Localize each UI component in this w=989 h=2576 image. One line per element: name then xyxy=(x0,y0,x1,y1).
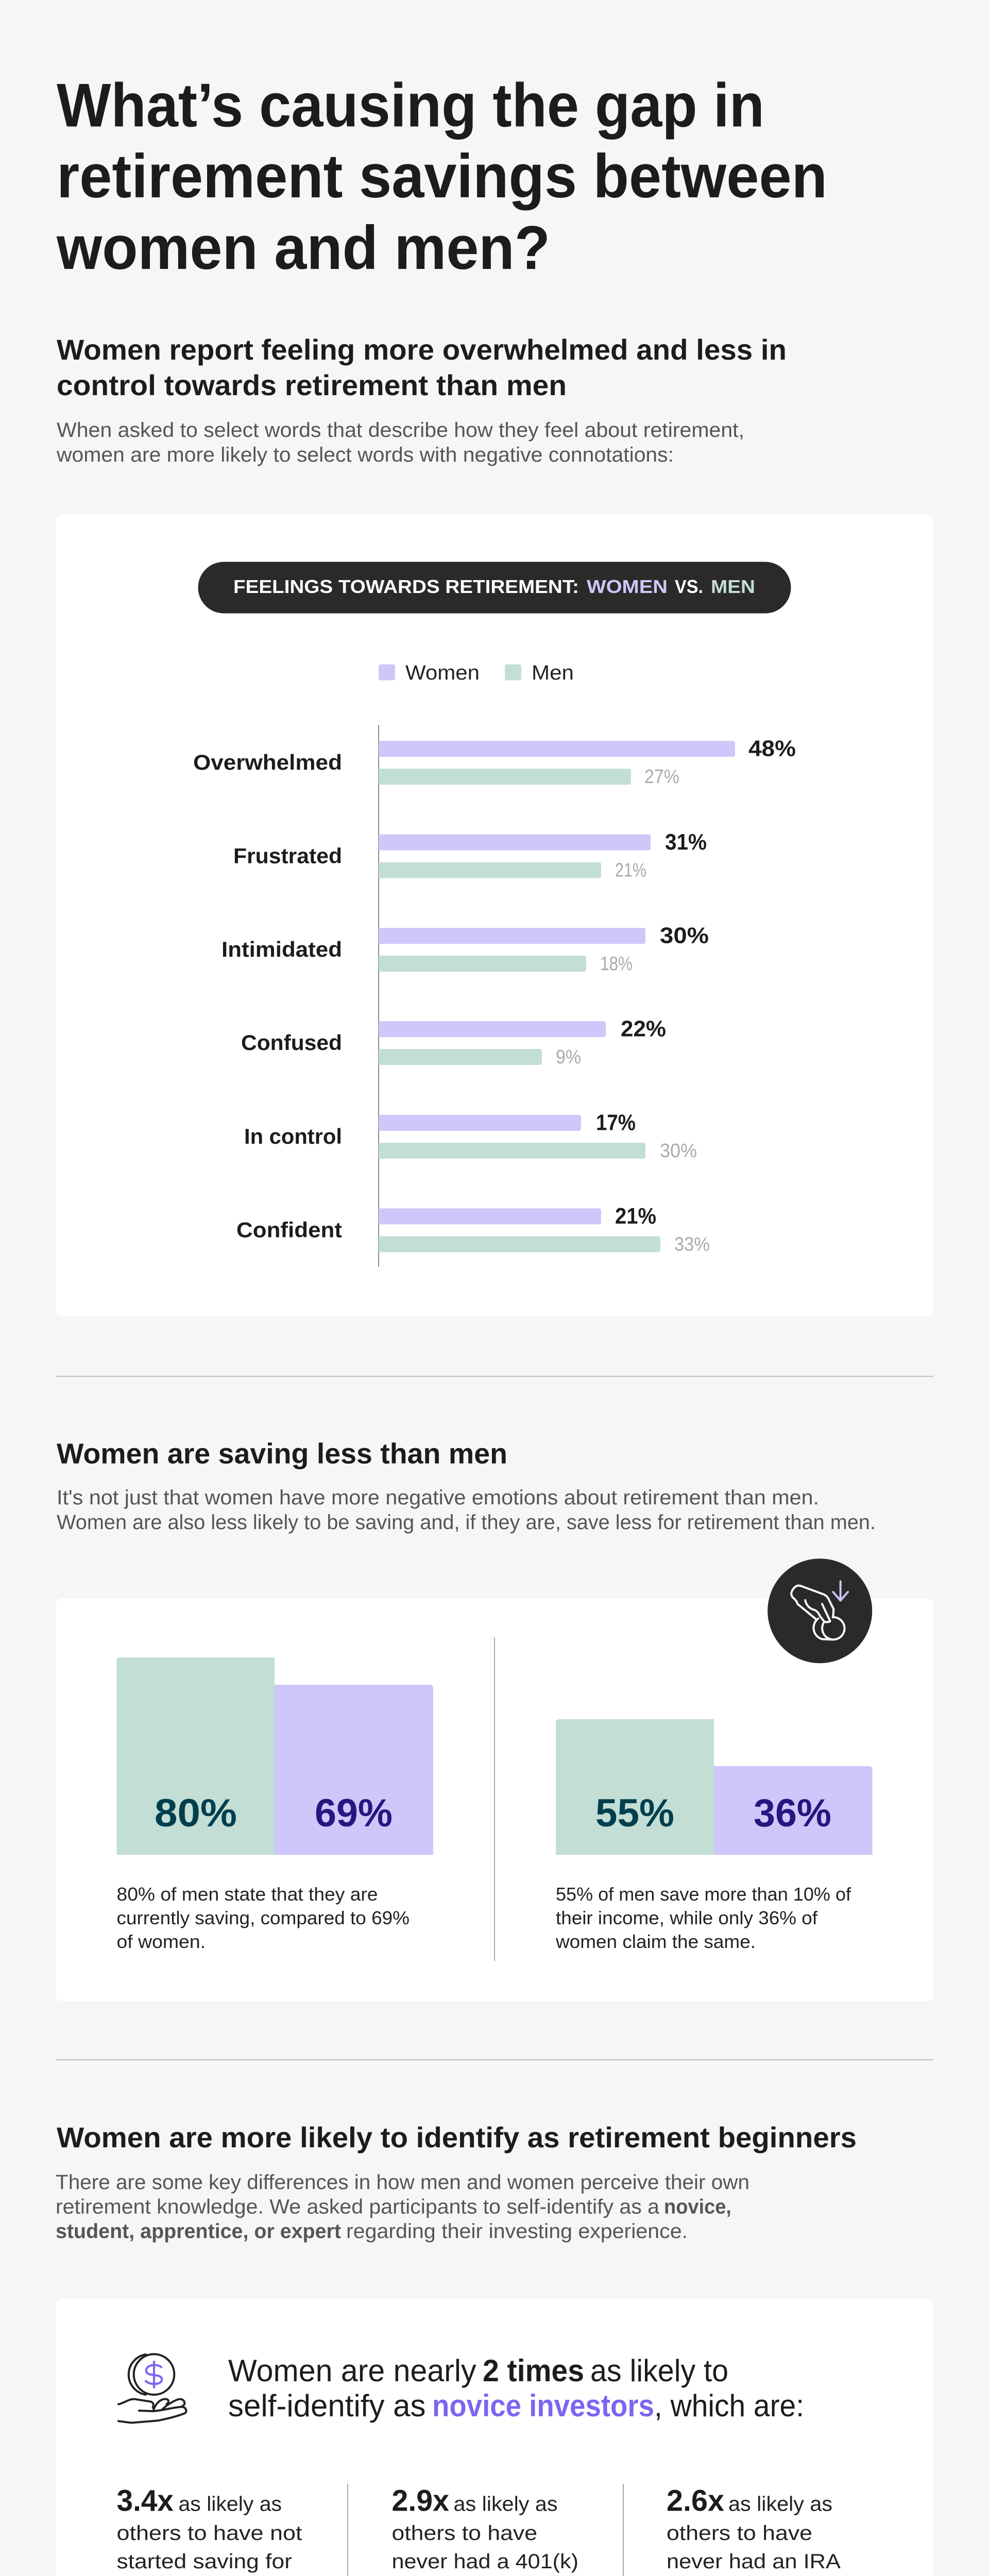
stat: 3.4x: others to have not xyxy=(116,2522,302,2545)
row: confused: 9% xyxy=(556,1046,581,1068)
row: intimidated: Intimidated xyxy=(221,937,342,961)
heading: women feel overwhelmed: Women report feeling more overwhelmed and less in xyxy=(57,333,787,366)
row: overwhelmed xyxy=(193,736,796,788)
caption: saving over 10%: their income, while only 36% of xyxy=(556,1907,818,1928)
bar pair: currently saving: 80% xyxy=(155,1791,237,1835)
legend: Women xyxy=(405,662,480,684)
chart title pill xyxy=(198,562,791,613)
row: frustrated xyxy=(233,829,707,881)
caption: saving over 10%: 55% of men save more than 10% of xyxy=(556,1884,851,1905)
text block: saving intro: It's not just that women have more negative emotions about retirement than men. xyxy=(57,1486,819,1509)
heading: retirement beginners: Women are more likely to identify as retirement beginners xyxy=(57,2121,857,2154)
chart title pill: WOMEN xyxy=(587,576,668,597)
stat: 3.4x: started saving for xyxy=(116,2550,292,2573)
row: intimidated: 30% xyxy=(660,923,709,948)
text block: beginners intro: retirement knowledge. We asked participants to self-identify as a xyxy=(56,2196,660,2218)
row: overwhelmed: 48% xyxy=(748,736,796,761)
bar pair: saving over 10%: 36% xyxy=(754,1791,831,1835)
row: intimidated xyxy=(221,923,709,975)
stat: 2.6x: as likely as xyxy=(728,2493,832,2515)
caption: currently saving: 80% of men state that they are xyxy=(116,1884,378,1905)
chart title pill: VS. xyxy=(675,576,703,597)
caption: currently saving: currently saving, compared to 69% xyxy=(116,1907,410,1928)
stat: 2.9x: as likely as xyxy=(453,2493,557,2515)
panel: saving comparison xyxy=(56,1558,933,2001)
panel: novice investors xyxy=(56,2299,933,2576)
legend: Men xyxy=(532,662,574,684)
stat: 2.6x: never had an IRA xyxy=(667,2550,841,2573)
title: retirement savings between xyxy=(57,142,827,211)
text block: beginners intro: novice, xyxy=(664,2196,731,2218)
callout heading: novice investors xyxy=(432,2388,654,2423)
row: in control: 30% xyxy=(660,1140,697,1162)
row: confident: 21% xyxy=(615,1204,656,1229)
stat: 2.6x xyxy=(667,2484,841,2573)
row: in control: In control xyxy=(244,1124,342,1148)
legend xyxy=(379,662,574,684)
title: women and men? xyxy=(56,213,550,282)
callout heading: , which are: xyxy=(654,2388,804,2423)
bar pair: saving over 10%: 55% xyxy=(595,1791,674,1835)
row: frustrated: 31% xyxy=(665,829,707,855)
text block: beginners intro xyxy=(56,2171,749,2243)
text block: beginners intro: regarding their investing experience. xyxy=(346,2220,688,2243)
row: in control xyxy=(244,1110,697,1162)
stat: 3.4x: 3.4x xyxy=(116,2484,174,2517)
text block: feelings intro: women are more likely to select words with negative connotations: xyxy=(56,444,674,466)
heading: women feel overwhelmed: control towards retirement than men xyxy=(57,369,567,401)
row: frustrated: 21% xyxy=(615,859,646,881)
caption: currently saving: of women. xyxy=(116,1931,206,1952)
chart title pill: FEELINGS TOWARDS RETIREMENT: xyxy=(233,576,579,597)
caption: saving over 10% xyxy=(555,1884,851,1952)
stat: 3.4x: as likely as xyxy=(178,2493,282,2515)
callout heading xyxy=(228,2353,804,2423)
row: confused xyxy=(241,1016,666,1068)
stat: 2.9x: never had a 401(k) xyxy=(391,2550,578,2573)
row: confident: 33% xyxy=(674,1233,710,1255)
title xyxy=(56,71,827,282)
bar pair: currently saving xyxy=(116,1657,433,1855)
text block: feelings intro xyxy=(56,419,744,466)
row: overwhelmed: 27% xyxy=(644,766,679,788)
row: intimidated: 18% xyxy=(600,953,633,975)
caption: currently saving xyxy=(116,1884,410,1952)
row: overwhelmed: Overwhelmed xyxy=(193,750,342,774)
caption: saving over 10%: women claim the same. xyxy=(555,1931,756,1952)
callout heading: self-identify as xyxy=(228,2388,425,2423)
panel: feelings chart xyxy=(56,514,933,1316)
stat: 3.4x xyxy=(116,2484,302,2576)
text block: beginners intro: There are some key differences in how men and women perceive their own xyxy=(56,2171,749,2194)
callout heading: as likely to xyxy=(590,2353,728,2388)
row: confident: Confident xyxy=(236,1218,342,1242)
row: confident xyxy=(236,1204,710,1255)
stat: 2.9x xyxy=(391,2484,578,2573)
text block: saving intro: Women are also less likely to be saving and, if they are, save less for retirement than men. xyxy=(57,1511,876,1534)
bar pair: currently saving: 69% xyxy=(315,1791,393,1835)
callout heading: Women are nearly xyxy=(228,2353,476,2388)
text block: feelings intro: When asked to select words that describe how they feel about retirement, xyxy=(57,419,744,442)
stat: 2.6x: 2.6x xyxy=(667,2484,724,2517)
icon: coin over hand xyxy=(118,2354,186,2423)
bar chart xyxy=(193,725,796,1267)
stat: 2.9x: others to have xyxy=(391,2522,537,2545)
heading: women feel overwhelmed xyxy=(57,333,787,401)
row: in control: 17% xyxy=(596,1110,636,1136)
text block: saving intro xyxy=(57,1486,876,1534)
stat: 2.6x: others to have xyxy=(667,2522,812,2545)
stat: 2.9x: 2.9x xyxy=(391,2484,449,2517)
bar pair: saving over 10% xyxy=(556,1719,873,1855)
chart title pill: MEN xyxy=(711,576,755,597)
heading: saving less: Women are saving less than men xyxy=(57,1437,507,1469)
row: confused: 22% xyxy=(621,1016,666,1042)
row: confused: Confused xyxy=(241,1030,342,1055)
row: frustrated: Frustrated xyxy=(233,844,342,868)
callout heading: 2 times xyxy=(483,2353,584,2388)
icon: hand dropping coin xyxy=(768,1558,872,1663)
text block: beginners intro: student, apprentice, or expert xyxy=(56,2220,341,2243)
title: What’s causing the gap in xyxy=(57,71,764,140)
